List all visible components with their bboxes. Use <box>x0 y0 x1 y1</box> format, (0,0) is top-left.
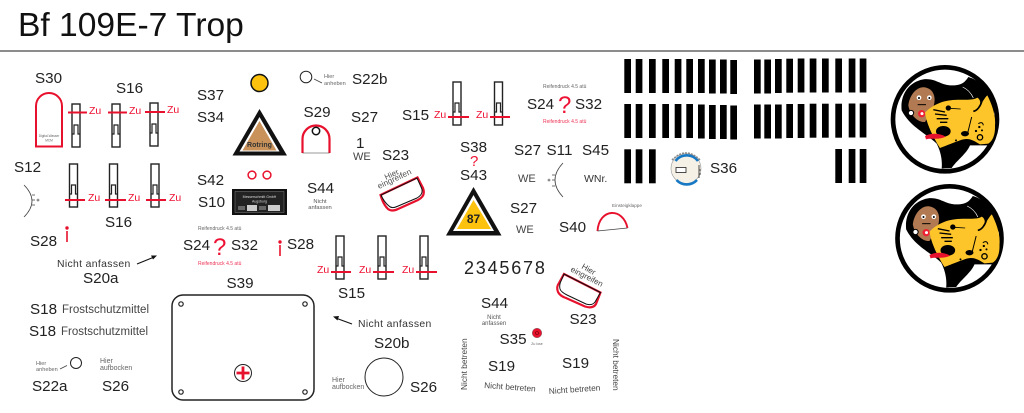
S26 left: Hier <box>100 358 114 365</box>
S34 Rotring triangle <box>197 109 287 156</box>
S15 lower latches: Zu <box>359 264 371 276</box>
S22a marking: anheben <box>36 367 58 373</box>
S28 centre <box>278 236 314 256</box>
S15 upper latches: S15 <box>402 107 429 124</box>
S42 red circles: S42 <box>197 172 224 189</box>
S24 S32 right: Reifendruck 4.5 atü <box>543 84 587 90</box>
S15 lower latches <box>317 236 437 302</box>
S27 with number: 1 <box>356 135 364 152</box>
S18 markings: S18 <box>30 301 57 318</box>
S20b label, arrow and circle: S20b <box>374 335 409 352</box>
S44 marking <box>307 180 334 211</box>
triangle 87 <box>446 187 502 236</box>
S18 markings <box>29 301 149 340</box>
S36 disc <box>671 153 737 184</box>
S23 upper marking: Hier <box>383 167 400 182</box>
S24 S32 left: S32 <box>231 237 258 254</box>
S20a label and arrow: S20a <box>83 270 119 287</box>
S24 S32 left: S24 <box>183 237 210 254</box>
S27 with number: WE <box>353 151 371 163</box>
S26 centre: S26 <box>410 379 437 396</box>
S38 S43 labels <box>460 139 487 184</box>
S28 left: S28 <box>30 233 57 250</box>
S28 centre: S28 <box>287 236 314 253</box>
S20b label, arrow and circle <box>333 316 432 396</box>
S27 S11 S45 group: S45 <box>582 142 609 159</box>
number row: 2345678 <box>464 258 547 278</box>
S10 data plate: Augsburg <box>252 200 267 204</box>
S44 marking: S44 <box>307 180 334 197</box>
S29 marking: S29 <box>304 104 331 121</box>
S23 lower marking: eingreifen <box>569 265 604 289</box>
stripes left group <box>624 59 737 183</box>
S15 lower latches: Zu <box>402 264 414 276</box>
S12 bracket: S12 <box>14 159 41 176</box>
S42 red circles <box>197 171 271 189</box>
S16 lower latches: Zu <box>88 192 100 204</box>
S30 marking <box>35 70 62 146</box>
S27 with number: S27 <box>351 109 378 126</box>
S26 left: S26 <box>102 378 129 395</box>
title: Bf 109E-7 Trop <box>18 7 244 44</box>
S24 S32 left: Reifendruck 4.5 atü <box>198 261 242 267</box>
S36 disc: S36 <box>710 160 737 177</box>
S19 labels and Nicht betreten: S19 <box>488 358 515 375</box>
S15 upper latches: Zu <box>476 109 488 121</box>
S18 markings: Frostschutzmittel <box>62 304 149 316</box>
S44 marking: anfassen <box>308 205 332 211</box>
S22b marking: S22b <box>352 71 387 88</box>
S10 data plate <box>198 189 287 215</box>
S23 upper marking: eingreifen <box>376 166 413 191</box>
S37 yellow circle <box>197 74 268 104</box>
S16 lower latches <box>65 164 181 231</box>
S27 lower <box>510 200 537 236</box>
S20a label and arrow <box>57 256 157 287</box>
badge bottom: jaguar emblem <box>897 186 1001 290</box>
S26 left <box>100 358 132 395</box>
S44 lower: S44 <box>481 295 508 312</box>
S20b label, arrow and circle: Nicht anfassen <box>358 319 432 330</box>
S22a marking: Hier <box>36 361 46 367</box>
S23 lower marking <box>557 262 604 328</box>
S24 S32 right: S32 <box>575 96 602 113</box>
S35 red disc: Zu lose <box>531 342 543 346</box>
S28 left <box>30 226 69 250</box>
S19 labels and Nicht betreten: Nicht betreten <box>484 380 536 394</box>
S23 upper marking: S23 <box>382 147 409 164</box>
S19 labels and Nicht betreten: Nicht betreten <box>611 339 621 391</box>
S35 red disc: S35 <box>500 331 527 348</box>
S34 Rotring triangle: Rotring <box>247 142 272 149</box>
S34 Rotring triangle: S34 <box>197 109 224 126</box>
stripes right group <box>754 58 866 183</box>
S35 red disc <box>500 328 543 348</box>
S27 lower: WE <box>516 224 534 236</box>
S44 marking: Nicht <box>313 199 327 205</box>
S29 marking <box>302 104 331 153</box>
S20a label and arrow: Nicht anfassen <box>57 259 131 270</box>
S26 centre <box>332 377 437 396</box>
S27 S11 S45 group <box>514 142 609 197</box>
S22b marking <box>300 71 387 88</box>
S38 S43 labels: S38 <box>460 139 487 156</box>
S40 half circle: S40 <box>559 219 586 236</box>
S27 S11 S45 group: S11 <box>546 142 572 159</box>
S12 bracket <box>14 159 41 217</box>
S44 lower <box>481 295 508 327</box>
S19 labels and Nicht betreten <box>459 338 621 396</box>
S16 upper latches: Zu <box>129 105 141 117</box>
S27 with number <box>351 109 378 163</box>
S39 panel with red cross: S39 <box>226 275 254 292</box>
S24 S32 left: Reifendruck 4.5 atü <box>198 226 242 232</box>
S40 half circle: Einsteigklappe <box>612 203 642 208</box>
S23 lower marking: S23 <box>570 311 597 328</box>
S30 marking: MCM <box>45 138 53 142</box>
badge top: jaguar emblem <box>893 67 997 171</box>
S24 S32 right: S24 <box>527 96 554 113</box>
S15 upper latches: Zu <box>434 109 446 121</box>
S40 half circle <box>559 203 642 236</box>
S38 S43 labels: S43 <box>460 167 487 184</box>
S30 marking: S30 <box>35 70 62 87</box>
S27 S11 S45 group: S27 <box>514 142 541 159</box>
S15 upper latches <box>402 82 510 125</box>
S24 S32 right: ? <box>558 92 571 119</box>
S18 markings: Frostschutzmittel <box>61 326 148 338</box>
S19 labels and Nicht betreten: S19 <box>562 355 589 372</box>
S26 centre: Hier <box>332 377 346 384</box>
S23 lower marking: Hier <box>580 262 597 277</box>
S19 labels and Nicht betreten: Nicht betreten <box>548 382 601 396</box>
S24 S32 left <box>183 226 258 267</box>
S24 S32 right <box>527 84 602 125</box>
S22a marking <box>32 358 82 395</box>
S27 lower: S27 <box>510 200 537 217</box>
S10 data plate: Messerschmitt GmbH <box>243 195 277 199</box>
S16 lower latches: S16 <box>105 214 132 231</box>
S19 labels and Nicht betreten: Nicht betreten <box>459 338 469 390</box>
S30 marking: Digital-Wasser <box>39 134 60 138</box>
S16 upper latches: Zu <box>89 105 101 117</box>
S18 markings: S18 <box>29 323 56 340</box>
S26 left: aufbocken <box>100 365 132 372</box>
S16 lower latches: Zu <box>169 192 181 204</box>
S38 S43 labels: ? <box>470 153 478 170</box>
S22b marking: anheben <box>324 81 346 87</box>
S39 panel with red cross <box>172 275 314 400</box>
S27 S11 S45 group: WNr. <box>584 173 607 185</box>
S16 upper latches <box>68 80 179 147</box>
S37 yellow circle: S37 <box>197 87 224 104</box>
S15 lower latches: Zu <box>317 264 329 276</box>
S22a marking: S22a <box>32 378 68 395</box>
S22b marking: Hier <box>324 74 334 80</box>
S26 centre: aufbocken <box>332 384 364 391</box>
triangle 87: 87 <box>467 212 480 226</box>
S16 upper latches: Zu <box>167 104 179 116</box>
S15 lower latches: S15 <box>338 285 365 302</box>
S16 lower latches: Zu <box>128 192 140 204</box>
S24 S32 right: Reifendruck 4.5 atü <box>543 119 587 125</box>
S24 S32 left: ? <box>213 234 226 261</box>
S10 data plate: S10 <box>198 194 225 211</box>
S16 upper latches: S16 <box>116 80 143 97</box>
S27 S11 S45 group: WE <box>518 173 536 185</box>
S44 lower: anfassen <box>482 321 506 327</box>
S44 lower: Nicht <box>487 315 501 321</box>
S23 upper marking <box>376 147 424 210</box>
